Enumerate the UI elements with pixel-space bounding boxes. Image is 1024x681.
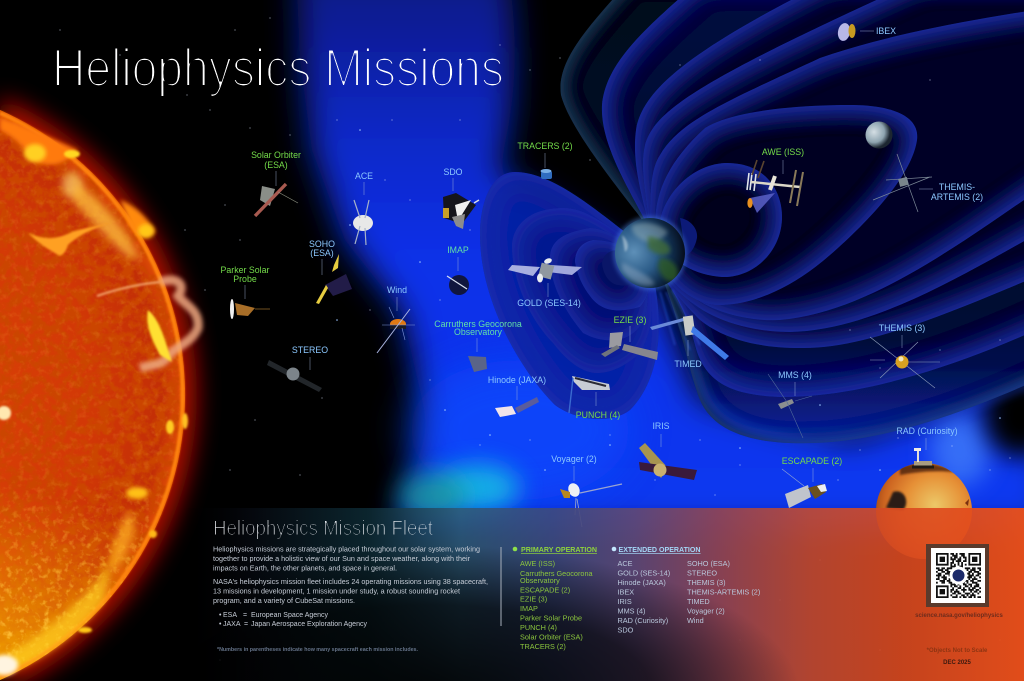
earth: [613, 216, 687, 290]
list: primary missions: Observatory: [520, 576, 560, 585]
heading: Heliophysics Mission Fleet: Heliophysics Mission Fleet: [213, 516, 433, 540]
spacecraft: Solar Orbiter: (ESA): [264, 160, 288, 170]
spacecraft: IRIS: [639, 421, 697, 480]
spacecraft: Carruthers Geocorona Observatory: [434, 319, 522, 372]
spacecraft: ESCAPADE: [782, 456, 842, 508]
spacecraft: ESCAPADE: ESCAPADE (2): [782, 456, 842, 466]
sun: [0, 97, 198, 681]
moon: [866, 122, 892, 148]
spacecraft: TIMED: [650, 315, 729, 369]
list: primary missions: Solar Orbiter (ESA): [520, 632, 583, 642]
spacecraft: Parker Solar Probe: Probe: [233, 274, 257, 284]
list: primary missions: ESCAPADE (2): [520, 586, 570, 594]
spacecraft: ACE: [353, 171, 373, 245]
text block: fleet description: Japan Aerospace Exploration Agency: [251, 621, 367, 628]
title: Heliophysics Missions: [52, 39, 504, 98]
list: extended missions column 2: Voyager (2): [687, 606, 725, 616]
spacecraft: IBEX: IBEX: [876, 26, 896, 36]
spacecraft: TRACERS: [517, 141, 573, 179]
divider line: [500, 547, 502, 626]
list: extended missions column 2: SOHO (ESA): [687, 559, 730, 568]
date: DEC 2025: [943, 660, 972, 666]
spacecraft: THEMIS-ARTEMIS: THEMIS-: [939, 182, 975, 192]
spacecraft: GOLD: GOLD (SES-14): [517, 298, 581, 308]
text block: fleet description: together to provide a holistic view of our Sun and space weather, along with their: [213, 556, 471, 563]
spacecraft: Solar Orbiter: [251, 150, 301, 216]
text block: fleet description: European Space Agency: [251, 612, 329, 619]
text block: fleet description: =: [243, 612, 247, 619]
list: extended missions column 1: [618, 559, 670, 634]
spacecraft: Wind: [377, 285, 415, 353]
list: extended missions column 1: GOLD (SES-14): [618, 568, 670, 578]
list: extended missions column 2: TIMED: [687, 597, 710, 606]
legend: extended operation: EXTENDED OPERATION: [618, 547, 700, 554]
text block: fleet description: 13 missions in development, 1 mission under study, a robust sounding rocket: [213, 588, 460, 596]
magnetosphere: tail lobes: [561, 0, 1024, 443]
spacecraft: Hinode: [488, 375, 546, 417]
list: primary missions: EZIE (3): [520, 594, 547, 604]
text block: fleet description: =: [244, 621, 248, 628]
spacecraft: Carruthers Geocorona Observatory: Carruthers Geocorona: [434, 319, 522, 329]
list: primary missions: Carruthers Geocorona: [520, 569, 594, 578]
spacecraft: IMAP: IMAP: [447, 245, 469, 255]
list: extended missions column 2: THEMIS (3): [687, 578, 726, 587]
sun limb: [0, 113, 183, 677]
list: extended missions column 2: Wind: [687, 616, 704, 625]
text block: fleet description: •: [219, 621, 222, 628]
list: primary missions: Parker Solar Probe: [520, 614, 582, 622]
spacecraft: Parker Solar Probe: Parker Solar: [221, 265, 270, 275]
url caption: science.nasa.gov/heliophysics: [915, 613, 1004, 619]
list: extended missions column 1: ACE: [618, 559, 633, 568]
magnetosphere: dayside lobes: [480, 172, 700, 419]
list: extended missions column 1: RAD (Curiosity): [618, 616, 668, 625]
spacecraft: Voyager: Voyager (2): [551, 454, 597, 464]
text block: fleet description: impacts on Earth, the other planets, and space in general.: [213, 566, 397, 572]
list: primary missions: [520, 559, 594, 651]
text block: fleet description: NASA's heliophysics mission fleet includes 24 operating missions using 38 spacecraft,: [213, 579, 488, 586]
spacecraft: MMS: [768, 370, 812, 438]
spacecraft: RAD on Curiosity rover: RAD (Curiosity): [896, 426, 958, 436]
spacecraft: THEMIS-ARTEMIS: [873, 154, 983, 212]
list: extended missions column 2: STEREO: [687, 568, 717, 578]
list: extended missions column 1: SDO: [618, 626, 634, 634]
spacecraft: IMAP: [447, 245, 469, 295]
list: primary missions: PUNCH (4): [520, 623, 557, 632]
legend: primary operation: PRIMARY OPERATION: [521, 547, 597, 554]
list: primary missions: IMAP: [520, 604, 538, 613]
spacecraft: TRACERS: TRACERS (2): [517, 141, 573, 151]
spacecraft: IBEX: [837, 22, 896, 42]
list: extended missions column 1: IBEX: [618, 588, 634, 596]
footnote: spacecraft numbers: *Numbers in parentheses indicate how many spacecraft each mission includes.: [217, 647, 418, 653]
mars: [876, 463, 972, 559]
spacecraft: Hinode: Hinode (JAXA): [488, 375, 546, 385]
text block: fleet description: ESA: [223, 612, 237, 619]
list: extended missions column 1: MMS (4): [618, 606, 645, 616]
spacecraft: STEREO: STEREO: [292, 345, 328, 355]
spacecraft: Solar Orbiter: Solar Orbiter: [251, 150, 301, 160]
spacecraft: AWE on ISS: [747, 147, 804, 213]
spacecraft: SOHO: [309, 239, 352, 304]
QR code: [926, 544, 989, 607]
spacecraft: EZIE: EZIE (3): [614, 315, 646, 325]
spacecraft: Parker Solar Probe: [221, 265, 270, 319]
spacecraft: Wind: Wind: [387, 285, 407, 295]
spacecraft: IRIS: IRIS: [652, 421, 670, 431]
spacecraft: ACE: ACE: [355, 171, 373, 181]
spacecraft: TIMED: TIMED: [674, 359, 702, 369]
sun flares and hot spots: [0, 118, 198, 675]
spacecraft: THEMIS-ARTEMIS: ARTEMIS (2): [931, 192, 983, 202]
spacecraft: GOLD: [508, 257, 582, 308]
spacecraft: EZIE: [601, 315, 658, 360]
panel: mission fleet band: [0, 508, 1024, 681]
spacecraft: PUNCH: PUNCH (4): [576, 410, 620, 420]
spacecraft: Carruthers Geocorona Observatory: Observatory: [454, 327, 503, 337]
spacecraft: SOHO: (ESA): [310, 248, 334, 258]
spacecraft: PUNCH: [569, 376, 620, 420]
list: primary missions: TRACERS (2): [520, 642, 566, 651]
spacecraft: SDO: SDO: [443, 167, 463, 177]
list: extended missions column 1: Hinode (JAXA): [618, 578, 666, 587]
spacecraft: SOHO: SOHO: [309, 239, 335, 249]
text block: fleet description: Heliophysics missions are strategically placed throughout our solar system, working: [213, 546, 480, 554]
spacecraft: MMS: MMS (4): [778, 370, 812, 380]
list: primary missions: AWE (ISS): [520, 559, 555, 568]
spacecraft: THEMIS: THEMIS (3): [879, 323, 925, 333]
note: objects not to scale: *Objects Not to Scale: [927, 648, 988, 654]
list: extended missions column 2: THEMIS-ARTEMIS (2): [687, 588, 760, 596]
text block: fleet description: program, and a variety of CubeSat missions.: [213, 598, 355, 605]
spacecraft: AWE on ISS: AWE (ISS): [762, 147, 804, 157]
list: extended missions column 2: [687, 559, 760, 625]
spacecraft: STEREO: [267, 345, 328, 392]
spacecraft: RAD on Curiosity rover: [896, 426, 958, 467]
spacecraft: THEMIS: [870, 323, 940, 388]
text block: fleet description: [213, 546, 488, 628]
text block: fleet description: •: [219, 612, 222, 619]
spacecraft: SDO: [443, 167, 479, 229]
text block: fleet description: JAXA: [223, 621, 241, 628]
background: blue solar wind band: [296, 0, 1024, 530]
spacecraft: Voyager: [551, 454, 622, 527]
list: extended missions column 1: IRIS: [618, 597, 632, 606]
